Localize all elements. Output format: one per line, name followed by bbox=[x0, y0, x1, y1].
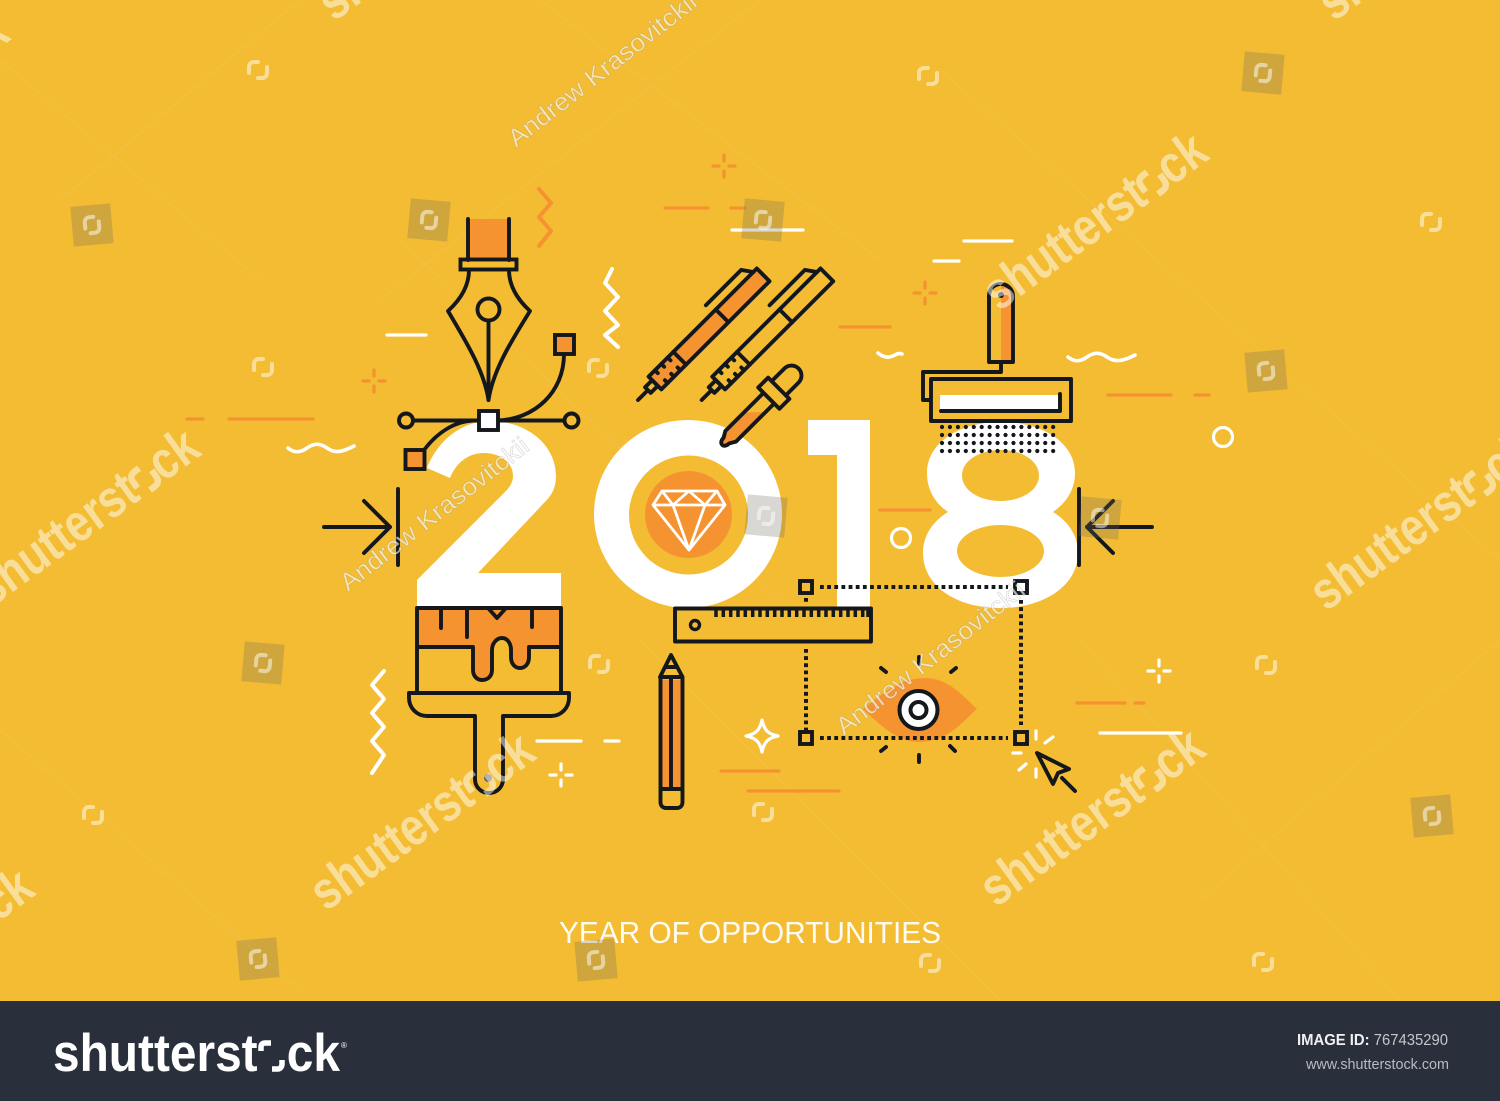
paint fill bbox=[417, 608, 561, 680]
watermark text: shutterstock bbox=[971, 120, 1218, 322]
roller hole bbox=[998, 292, 1004, 298]
zigzag: white top bbox=[605, 269, 618, 347]
arrow: right measure bbox=[1079, 489, 1152, 565]
icon: fountain pen nib with bezier handles bbox=[399, 219, 578, 469]
paint dots bbox=[942, 427, 1061, 451]
number 2018 bbox=[417, 420, 1078, 608]
brush handle bbox=[409, 693, 569, 793]
icon: paint roller bbox=[923, 284, 1071, 451]
selection corner BR bbox=[1015, 732, 1027, 744]
selection corner BL bbox=[800, 732, 812, 744]
watermark text: Andrew Krasovitckii bbox=[830, 576, 1031, 741]
eye shape bbox=[863, 678, 977, 742]
zigzag: white left bbox=[372, 671, 384, 773]
selection corner TL bbox=[800, 581, 812, 593]
footer logo: shutterstock bbox=[53, 1024, 340, 1083]
digit 1 bbox=[808, 420, 870, 608]
nib collar bbox=[460, 260, 516, 270]
white ring right bbox=[1214, 428, 1232, 446]
sparkle bbox=[746, 720, 778, 752]
digit 2 bbox=[417, 421, 561, 608]
footer bar bbox=[0, 1001, 1500, 1101]
pupil bbox=[910, 702, 926, 718]
icon: outline marker pen bbox=[688, 261, 833, 406]
roller highlight bbox=[940, 395, 1058, 409]
wave: white small bbox=[878, 353, 902, 357]
handle right bbox=[564, 414, 578, 428]
nib bbox=[448, 219, 530, 400]
digit 0 bbox=[594, 420, 782, 608]
icon: cursor with clicks bbox=[1013, 731, 1075, 791]
registered mark: ® bbox=[341, 1041, 347, 1050]
icon: pencil bbox=[660, 655, 682, 808]
arrow: left measure bbox=[324, 489, 398, 565]
tagline: YEAR OF OPPORTUNITIES bbox=[559, 915, 941, 950]
anchor white bbox=[479, 411, 498, 430]
watermark text: shutterstock bbox=[298, 720, 545, 922]
digit 8 bbox=[923, 422, 1078, 608]
icon: eye in selection frame bbox=[800, 581, 1027, 762]
watermark logos bbox=[70, 51, 1454, 982]
icon: orange marker pen bbox=[625, 261, 770, 406]
wave: white left bbox=[288, 444, 354, 452]
icon: paint brush bbox=[409, 608, 569, 793]
handle hole bbox=[484, 774, 492, 782]
nib hole and slit bbox=[487, 321, 490, 400]
wave: white right bbox=[1068, 353, 1135, 361]
icon: ruler bbox=[675, 608, 871, 642]
ruler ticks bbox=[716, 608, 868, 617]
icon: pipette bbox=[712, 358, 809, 455]
footer logo mark bbox=[261, 1043, 282, 1069]
iris bbox=[900, 691, 938, 729]
nib collar fill bbox=[469, 219, 508, 260]
decorative orange lines bbox=[187, 208, 1209, 791]
nib circle bbox=[478, 298, 500, 320]
anchor orange top bbox=[555, 335, 574, 354]
watermark text: Andrew Krasovitckii bbox=[502, 0, 703, 153]
image id: IMAGE ID: 767435290 bbox=[1297, 1032, 1448, 1049]
roller handle bbox=[1001, 285, 1012, 362]
digit 0 inner circle bbox=[629, 456, 748, 574]
plus marks: orange bbox=[363, 155, 936, 392]
selection dotted lines bbox=[806, 587, 1021, 738]
roller body bbox=[931, 379, 1071, 421]
watermark text: shutterstock bbox=[968, 716, 1215, 918]
decorative white lines bbox=[387, 230, 1181, 741]
plus marks: white bbox=[550, 660, 1170, 786]
watermark text: Andrew Krasovitckii bbox=[334, 432, 535, 597]
click sparks bbox=[1013, 731, 1053, 777]
bezier curves bbox=[424, 354, 564, 450]
anchor orange bottom bbox=[406, 450, 424, 469]
bezier handle line bbox=[413, 419, 564, 422]
website: www.shutterstock.com bbox=[1305, 1057, 1449, 1073]
handle left bbox=[399, 414, 413, 428]
white ring centre bbox=[892, 528, 910, 548]
icon: diamond badge bbox=[645, 471, 732, 558]
brush outline bbox=[417, 608, 561, 693]
zigzag: orange bbox=[539, 189, 551, 246]
ruler hole bbox=[690, 620, 700, 630]
selection corner TR bbox=[1015, 581, 1027, 593]
eye rays bbox=[881, 657, 956, 762]
